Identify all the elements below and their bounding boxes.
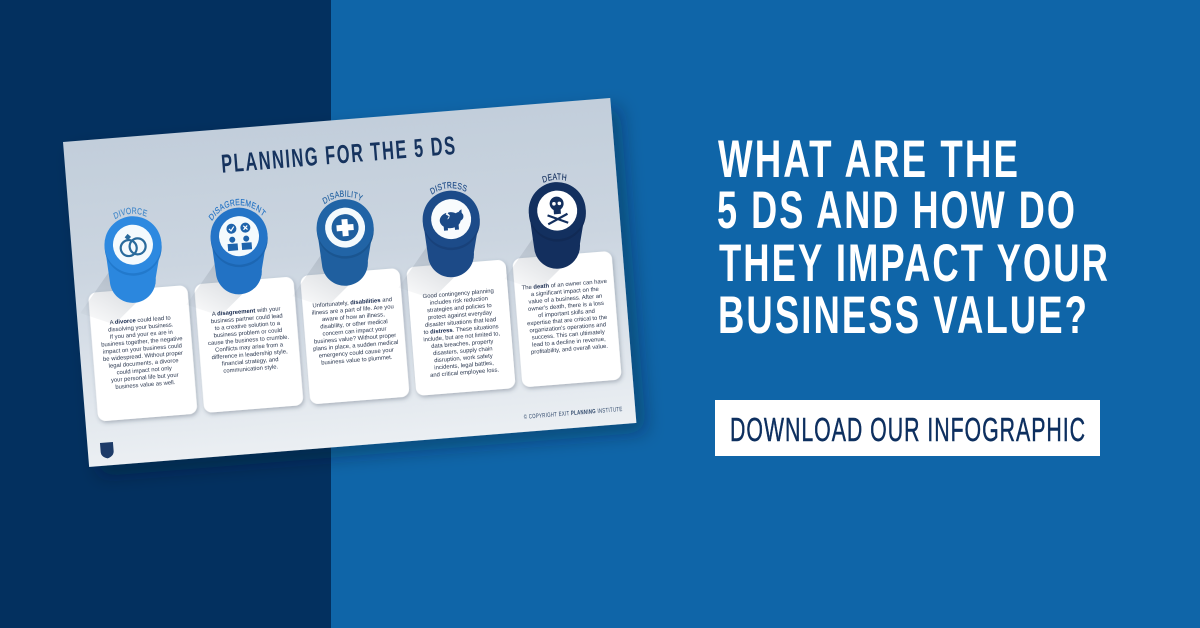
card: disability: disability, or other medical [320,319,388,331]
card: distress: disaster situations that lead [425,317,496,329]
headline [717,130,1110,345]
card: disability: emergency could cause your [319,348,394,360]
card: distress: data breaches, property [431,339,494,350]
card: death: lead to a decline in revenue, [532,337,606,349]
card: divorce: could impact not only [116,366,172,376]
card: disagreement: cause the business to crumble. [208,335,290,347]
card: death: organization's operations and [529,322,606,334]
copyright line: © COPYRIGHT EXIT PLANNING INSTITUTE [524,405,623,421]
card: distress: include, but are not limited to, [423,331,501,343]
card: disagreement: Conflicts may arise from a [215,342,284,354]
card: divorce: A [109,320,115,326]
card: disability: aware of how an illness, [322,312,385,323]
card: distress: includes risk reduction [430,296,488,307]
card: divorce: If you and your ex are in [110,330,173,341]
card: distress: protect against everyday [428,310,492,321]
cylinder: disability [294,190,374,307]
card: divorce [88,285,198,422]
card: distress: incidents, legal battles, [434,361,494,371]
card: disability: Unfortunately, [312,300,350,310]
label: disagreement: DISAGREEMENT [208,198,266,221]
card: disability: concern can impact your [322,326,387,338]
card: death: success. This can ultimately [532,330,605,341]
icon: two people agreeing and disagreeing [226,222,252,251]
card: disagreement: financial strategy, and [222,357,279,368]
card: disagreement [194,276,304,413]
card: disability: plans in place, a sudden medical [313,340,399,353]
card: divorce: divorce could lead to [115,315,171,326]
card: divorce: impact on your business could [103,343,182,356]
card: distress: disruption, work safety [434,354,493,364]
poster title: PLANNING FOR THE 5 DS [220,130,458,179]
card: disability [300,268,410,405]
background: left navy panel [0,0,331,628]
icon: wedding rings [120,233,146,257]
infographic poster [63,98,654,476]
poster sheet [63,98,636,467]
card: distress: and critical employee loss. [430,367,500,379]
card: divorce: dissolving your business. [108,322,174,334]
label: death: DEATH [542,173,566,183]
label: disability: DISABILITY [322,190,364,204]
card: disagreement: business partner could lead [211,313,283,325]
card: disability: illness are a part of life. Are you [312,304,394,317]
card: disagreement: communication style. [223,364,279,375]
label: distress: DISTRESS [430,182,467,195]
icon: broken piggy bank [439,209,464,231]
card: distress [406,259,516,396]
card: death: death of an owner can have [533,279,607,291]
card: death: profitability, and overall value. [531,344,609,356]
logo shield [100,442,114,459]
cylinder: divorce [86,207,162,324]
card: death [512,251,622,387]
card: divorce: business together, the negative [101,336,184,349]
card: death: The [521,285,534,292]
card: death: value of a business. After an [528,294,603,306]
card: disability: disabilities and [350,297,392,306]
card: distress: strategies and policies to [427,303,493,314]
icon: skull and crossbones [546,196,568,224]
label: divorce: DIVORCE [113,207,148,220]
card: distress: Good contingency planning [422,288,494,300]
card: death: a significant impact on the [531,287,600,298]
card: disability: business value? Without proper [314,333,397,346]
cylinder: distress [400,182,480,298]
button: download our infographic [715,400,1100,456]
card: divorce: business value as well. [115,380,176,391]
card: divorce: your personal life but your [111,373,179,384]
icon: medical cross [331,213,360,242]
card: disagreement: A [212,311,217,318]
card: death: expertise that are critical to the [527,315,608,327]
card: disagreement: disagreement with your [217,306,281,317]
card: disagreement: business problem or could [213,328,282,339]
headline: WHAT ARE THE [718,130,1020,189]
cylinder: disagreement [193,198,268,316]
card: death: of important skills and [538,309,595,319]
cylinder: death [506,173,586,290]
card: disability: business value to plummet. [321,355,393,367]
card: divorce: legal documents, a divorce [108,358,180,370]
card: distress: to [423,330,430,336]
card: divorce: be widespread. Without proper [103,351,183,363]
card: disagreement: difference in leadership style, [211,349,288,361]
card: distress: distress. These situations [430,324,499,336]
card: death: owner's death, there is a loss [528,301,604,313]
card: disagreement: to a creative solution to a [215,321,281,332]
card: distress: disasters, supply chain [433,346,493,357]
